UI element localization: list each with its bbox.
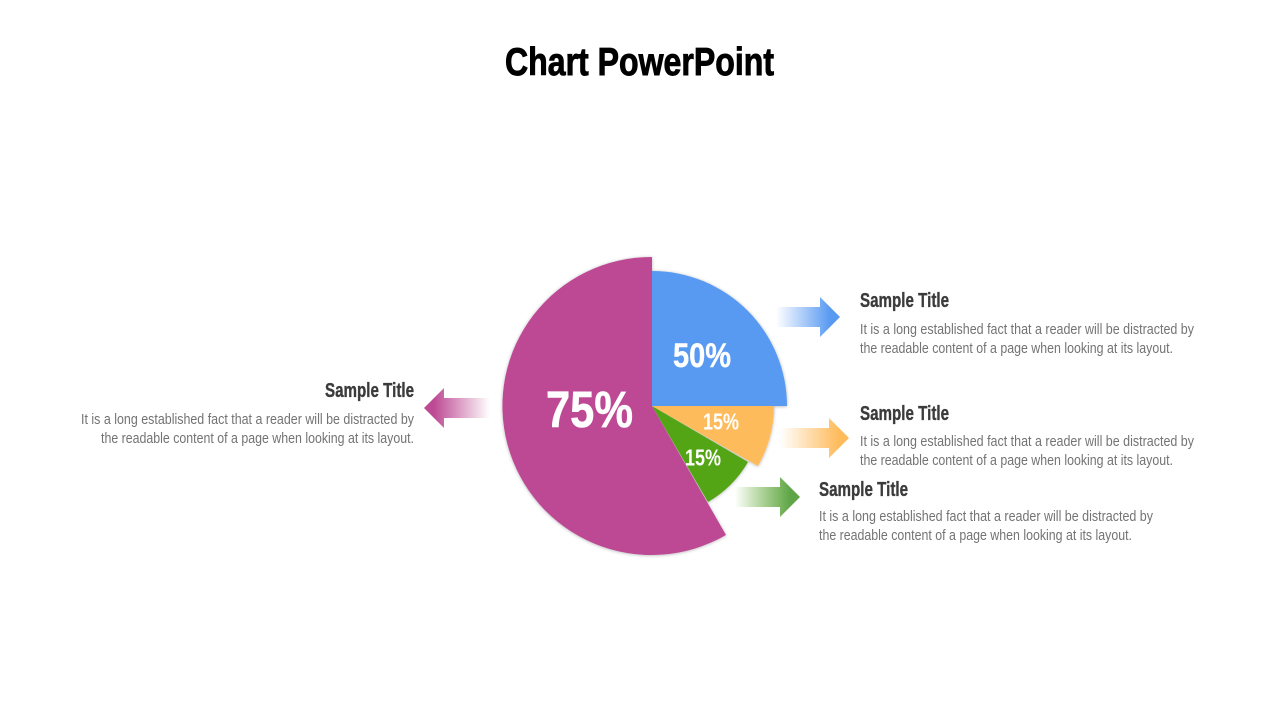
arrow: green [735, 477, 800, 517]
text block: green [819, 479, 1154, 544]
arrow: orange [780, 418, 849, 458]
slice: blue 50% [652, 271, 787, 406]
label: 50%: 50% [673, 337, 731, 375]
text block: orange: the readable content of a page when looking at its layout. [860, 453, 1173, 469]
slice: orange 15% [652, 406, 774, 466]
text block: orange: It is a long established fact that a reader will be distracted by [860, 434, 1195, 450]
label: green 15%: 15% [685, 444, 721, 470]
label: orange 15%: 15% [703, 408, 739, 434]
text block: magenta: It is a long established fact that a reader will be distracted by [81, 412, 415, 428]
pie chart [502, 257, 787, 555]
text block: magenta: Sample Title [325, 380, 414, 402]
text block: blue: It is a long established fact that a reader will be distracted by [860, 322, 1195, 338]
text block: green: It is a long established fact that a reader will be distracted by [819, 509, 1154, 525]
title: Chart PowerPoint [505, 41, 774, 84]
text block: orange [860, 403, 1195, 469]
text block: magenta [81, 380, 415, 447]
text block: blue [860, 290, 1195, 357]
text block: magenta: the readable content of a page when looking at its layout. [101, 431, 414, 447]
arrow: magenta [424, 388, 490, 428]
slice: magenta 75% [502, 257, 726, 555]
text block: blue: the readable content of a page when looking at its layout. [860, 341, 1173, 357]
text block: green: the readable content of a page when looking at its layout. [819, 528, 1132, 544]
text block: blue: Sample Title [860, 290, 949, 312]
arrow: blue [776, 297, 840, 337]
text block: green: Sample Title [819, 479, 908, 501]
label: 75%: 75% [546, 381, 633, 438]
pie slices [502, 257, 787, 555]
text block: orange: Sample Title [860, 403, 949, 425]
slice: green 15% [652, 406, 748, 502]
